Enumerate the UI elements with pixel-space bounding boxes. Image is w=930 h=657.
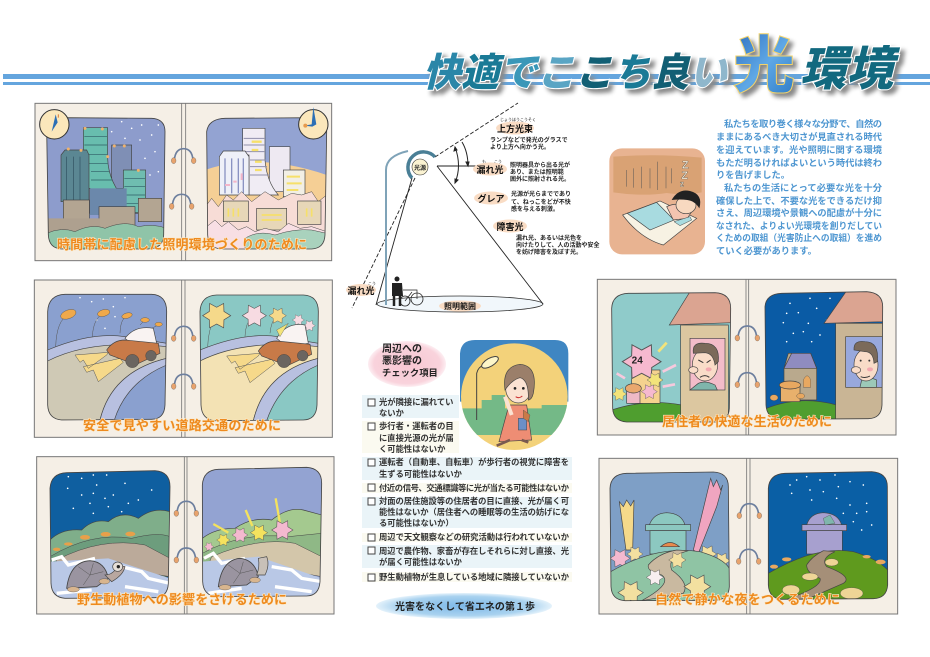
item 5 <box>368 496 569 528</box>
item 5: 対面の居住施設等の住居者の目に直接、光が届く可 <box>379 496 569 506</box>
heading: checklist oval: チェック項目 <box>382 368 438 378</box>
intro illustration: sleeping person: Z <box>681 170 688 182</box>
caption: 自然で静かな夜をつくるために <box>655 592 840 607</box>
title: 快適でここち良い <box>423 52 728 95</box>
title: 環境 <box>800 42 901 95</box>
illustration: car on road <box>34 280 332 437</box>
item 8: 野生動植物が生息している地域に隣接していないか <box>379 572 570 582</box>
label: glare: 感を与える刺激。 <box>511 205 559 213</box>
label: glare <box>474 190 571 213</box>
item 1: 光が隣接に漏れてい <box>379 397 453 407</box>
intro text: なされた、よりよい光環境を創りだしてい <box>716 220 882 231</box>
illustration: man in house <box>597 279 896 435</box>
caption: 時間帯に配慮した照明環境づくりのために <box>57 237 307 252</box>
intro illustration: sleeping person <box>609 148 705 254</box>
heading: checklist oval: 周辺への <box>382 343 422 355</box>
label: spill light: 囲外に照射される光。 <box>510 175 570 183</box>
intro text: もただ明るければよいという時代は終わ <box>716 157 882 168</box>
item 4: 付近の信号、交通標識等に光が当たる可能性はないか <box>379 483 570 493</box>
label: spill light: 漏れ光 <box>476 164 504 175</box>
label: obtrusive light: を妨げ障害を及ぼす光。 <box>516 248 582 256</box>
header rule lines <box>3 74 930 85</box>
item 3 <box>368 457 569 479</box>
item 7 <box>368 546 570 567</box>
label: lighting range <box>439 300 481 312</box>
label: spill light: 照明器具から出る光が <box>510 161 570 169</box>
label: upward light: 上方光束 <box>497 123 533 134</box>
intro illustration: sleeping person: Z <box>682 159 689 171</box>
row bands <box>362 395 572 582</box>
label: obtrusive light: 障害光 <box>496 221 524 232</box>
item 1 <box>368 397 453 418</box>
heading: checklist oval <box>368 341 446 387</box>
intro text: くための取組（光害防止への取組）を進め <box>716 232 882 243</box>
checklist <box>362 395 572 582</box>
street light pole and lamp: 光源 <box>414 164 426 172</box>
illustration: city at night and overlit city <box>35 103 332 261</box>
label: glare: 光源が光らまでであり <box>511 190 571 198</box>
street light pole and lamp <box>386 151 435 305</box>
intro text: ままにあるべき大切さが見直される時代 <box>716 131 883 142</box>
label: obtrusive light <box>493 220 600 256</box>
label: obtrusive light: 漏れ光、あるいは光色を <box>516 234 582 242</box>
item 2 <box>368 421 454 454</box>
label: spill light bottom <box>346 280 376 296</box>
label: spill light bottom: こう <box>368 280 376 286</box>
label: glare: グレア <box>477 193 505 204</box>
item 2: に直接光源の光が届 <box>379 433 454 443</box>
intro text <box>716 118 883 256</box>
intro text: りを告げました。 <box>716 169 790 180</box>
label: obtrusive light: 向けたりして、人の活動や安全 <box>516 241 600 249</box>
caption: 安全で見やすい道路交通のために <box>83 418 281 433</box>
label: upward light: より上方へ向かう光。 <box>490 143 550 151</box>
item 1: ないか <box>379 408 405 418</box>
label: glare: て、ねっこをどが不快 <box>511 198 571 206</box>
item 6: 周辺で天文観察などの研究活動は行われていないか <box>379 532 570 542</box>
intro text: 私たちを取り巻く様々な分野で、自然の <box>724 118 882 129</box>
intro text: 確保した上で、不要な光をできるだけ抑 <box>716 195 882 206</box>
title <box>423 32 901 101</box>
title: 光 <box>733 32 795 101</box>
item 5: 能性はないか（居住者への睡眠等の生活の妨げにな <box>379 507 569 517</box>
item 3: 生ずる可能性はないか <box>379 469 463 479</box>
panel: wildlife <box>37 457 334 614</box>
person with bicycle <box>392 276 423 306</box>
icon: clock right <box>299 107 328 139</box>
label: upward light <box>490 116 568 151</box>
intro text: を迎えています。光や照明に関する環境 <box>716 144 883 155</box>
intro text: さえ、周辺環境や景観への配慮が十分に <box>716 207 882 218</box>
label: lighting range: 照明範囲 <box>444 301 476 311</box>
item 7: が届く可能性はないか <box>379 557 463 567</box>
item 2: く可能性はないか <box>379 444 446 454</box>
label: spill light bottom: 漏れ光 <box>347 285 375 296</box>
label: spill light <box>473 158 570 183</box>
item 5: る可能性はないか） <box>379 518 454 528</box>
item 2: 歩行者・運転者の目 <box>379 421 454 431</box>
item 3: 運転者（自動車、自転車）が歩行者の視覚に障害を <box>379 457 569 467</box>
icon: clock left <box>40 110 69 139</box>
illustration: turtle and hills <box>37 457 334 614</box>
illuminated ground ellipse <box>377 296 543 312</box>
panel: natural quiet night <box>599 458 898 614</box>
caption: 野生動植物への影響をさけるために <box>77 592 287 607</box>
panel: road traffic <box>34 280 332 437</box>
label: spill light: も こう <box>482 158 502 164</box>
caption: 居住者の快適な生活のために <box>662 414 832 429</box>
intro illustration: sleeping person: z <box>680 180 684 189</box>
callout: first step <box>376 593 552 619</box>
illustration: man in house: 24 <box>632 355 643 366</box>
illustration: observatory on hill <box>599 458 898 614</box>
label: upward light: ランプなどで発光のグラスで <box>490 136 568 144</box>
diagram: street light terminology <box>346 103 600 312</box>
panel: lighting for time of day <box>35 103 332 261</box>
illustration: woman on phone under street light <box>460 340 568 450</box>
intro text: ていく必要があります。 <box>716 245 817 256</box>
heading: checklist oval: 悪影響の <box>382 354 422 367</box>
intro text: 私たちの生活にとって必要な光を十分 <box>724 182 883 193</box>
label: spill light: あり、または照明範 <box>510 168 564 176</box>
label: upward light: じょうほうこうそく <box>500 116 536 122</box>
lines of the light cone <box>352 103 543 308</box>
item 7: 周辺で農作物、家畜が存在しそれらに対し直接、光 <box>379 546 570 556</box>
callout: first step: 光害をなくして省エネの第１歩 <box>395 600 535 613</box>
panel: residents <box>597 279 896 435</box>
